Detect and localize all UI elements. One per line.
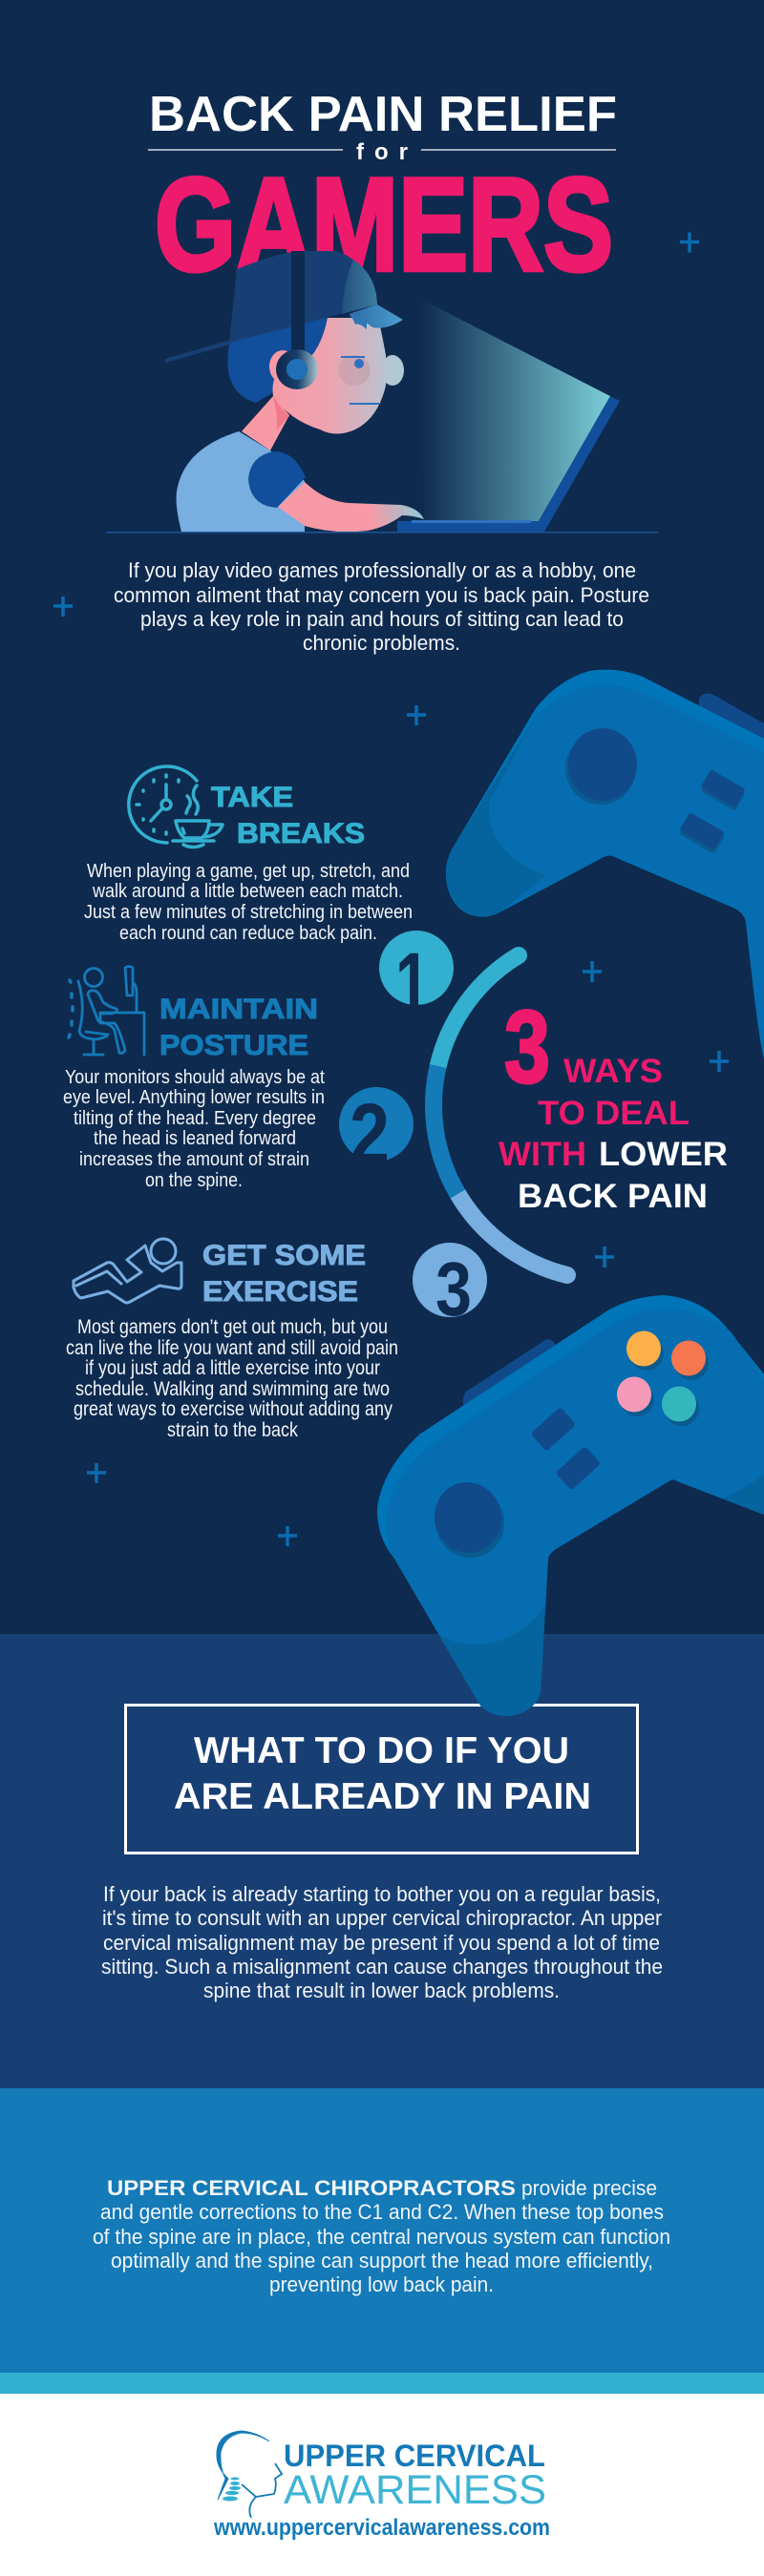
- eye: [354, 359, 364, 368]
- get some exercise section: [66, 1239, 398, 1441]
- cheek: [338, 355, 371, 386]
- decorative plus signs: [53, 233, 729, 1546]
- controller shaded right grip: [723, 1475, 764, 1515]
- eyebrow: [341, 356, 365, 358]
- icon: seated posture: [69, 966, 144, 1055]
- box: what to do heading: [126, 1705, 638, 1853]
- accent strip: [0, 2373, 764, 2394]
- face: [273, 318, 386, 433]
- button: pink: [617, 1376, 651, 1413]
- paragraph: upper cervical chiropractors: of the spine are in place, the central nervous system can function: [93, 2225, 670, 2249]
- paragraph: already in pain: [101, 1882, 663, 2002]
- button: orange: [671, 1340, 706, 1376]
- hat visor: [349, 304, 403, 328]
- intro paragraph: common ailment that may concern you is back pain. Posture: [114, 583, 649, 607]
- paragraph: upper cervical chiropractors: provide precise: [521, 2176, 657, 2200]
- icon: head and spine: [217, 2431, 282, 2518]
- title line: back pain relief: BACK PAIN RELIEF: [149, 87, 617, 142]
- arm: [278, 482, 424, 532]
- heading: get some: GET SOME: [202, 1240, 366, 1271]
- neck: [242, 396, 289, 450]
- joystick shadow: [565, 732, 636, 805]
- paragraph: upper cervical chiropractors: [93, 2176, 670, 2296]
- arc: three-step progress ring: [434, 955, 567, 1275]
- headphone inner: [286, 359, 308, 380]
- action button 2 shadow: [679, 816, 725, 854]
- lower: LOWER: [599, 1136, 728, 1173]
- button: teal: [662, 1386, 696, 1422]
- shirt: [177, 431, 305, 532]
- d-pad button 2: [555, 1446, 601, 1491]
- illustration: gamer at laptop: [106, 251, 658, 533]
- exercise text: great ways to exercise without adding any: [74, 1398, 393, 1420]
- joystick: [427, 1475, 509, 1560]
- paragraph: already in pain: it's time to consult with an upper cervical chiropractor. An upper: [102, 1906, 662, 1930]
- heading: take: TAKE: [211, 782, 293, 813]
- maintain posture section: [63, 966, 325, 1191]
- take breaks section: [84, 766, 413, 944]
- hair: [227, 310, 328, 403]
- heading: 3 ways to deal with lower back pain: [499, 989, 728, 1215]
- controller shaded lobe: [446, 716, 545, 916]
- title word: for: for: [356, 139, 408, 165]
- paragraph: upper cervical chiropractors: UPPER CERVICAL CHIROPRACTORS: [107, 2176, 516, 2200]
- title word: gamers: GAMERS: [155, 151, 613, 299]
- take breaks text: walk around a little between each match.: [92, 881, 403, 902]
- neck shadow: [273, 396, 289, 429]
- joystick: [568, 728, 637, 801]
- exercise text: [66, 1316, 398, 1441]
- panel: chiropractors background: [0, 2088, 764, 2373]
- ear: [269, 350, 296, 383]
- nose: [381, 355, 404, 386]
- headphone band: [291, 251, 305, 350]
- take breaks text: Just a few minutes of stretching in between: [84, 902, 413, 923]
- action button 1: [700, 769, 746, 807]
- intro paragraph: chronic problems.: [303, 631, 460, 655]
- controller: top: [446, 669, 764, 1058]
- hair tuft: [350, 311, 367, 329]
- paragraph: already in pain: If your back is already starting to bother you on a regular basis,: [103, 1882, 661, 1906]
- paragraph: upper cervical chiropractors: optimally and the spine can support the head more efficiently,: [111, 2249, 653, 2272]
- headphone cup: [276, 349, 318, 389]
- hat front panel: [342, 260, 377, 314]
- heading: breaks: BREAKS: [237, 818, 365, 849]
- number badge 3: 3: [435, 1246, 472, 1331]
- title rule left: [148, 149, 343, 151]
- number badge 2: [339, 1087, 414, 1183]
- exercise text: strain to the back: [167, 1419, 298, 1441]
- controller body: [446, 669, 764, 1058]
- number badge 2: 2: [350, 1087, 390, 1183]
- button shadows: [620, 1336, 709, 1426]
- website: www.uppercervicalawareness.com: [213, 2515, 550, 2541]
- paragraph: upper cervical chiropractors: preventing low back pain.: [269, 2272, 494, 2296]
- laptop: [397, 396, 620, 532]
- background: dark navy section: [0, 0, 764, 1634]
- box: what to do heading: ARE ALREADY IN PAIN: [174, 1776, 591, 1817]
- button: yellow: [626, 1330, 661, 1367]
- to deal: TO DEAL: [538, 1095, 690, 1132]
- panel: already in pain background: [0, 1634, 764, 2088]
- hat: [229, 251, 377, 343]
- logo: upper cervical awareness: [213, 2431, 550, 2541]
- box: what to do heading: WHAT TO DO IF YOU: [194, 1730, 569, 1771]
- panel: footer background: [0, 2394, 764, 2576]
- intro paragraph: If you play video games professionally or as a hobby, one: [128, 558, 636, 582]
- big number 3: 3: [504, 989, 550, 1104]
- paragraph: already in pain: sitting. Such a misalignment can cause changes throughout the: [101, 1955, 663, 1979]
- exercise text: Most gamers don’t get out much, but you: [77, 1316, 388, 1338]
- maintain posture text: [63, 1067, 325, 1191]
- with: WITH: [499, 1136, 586, 1173]
- controller body: [377, 1295, 764, 1716]
- take breaks text: each round can reduce back pain.: [119, 923, 377, 944]
- controller shaded grip: [438, 1606, 545, 1716]
- shoulder button: [699, 694, 764, 764]
- back pain: BACK PAIN: [518, 1178, 708, 1215]
- d-pad button 1: [530, 1407, 576, 1452]
- exercise text: schedule. Walking and swimming are two: [75, 1378, 390, 1400]
- maintain posture text: eye level. Anything lower results in: [63, 1087, 325, 1108]
- light cone from screen: [414, 296, 610, 521]
- maintain posture text: on the spine.: [145, 1170, 243, 1191]
- heading: posture: POSTURE: [159, 1030, 308, 1061]
- paragraph: already in pain: spine that result in lower back problems.: [203, 1979, 560, 2002]
- icon: sit-up: [74, 1239, 181, 1303]
- controller: bottom: [377, 1295, 764, 1716]
- heading: maintain: MAINTAIN: [159, 994, 318, 1025]
- action button 2: [679, 812, 725, 850]
- intro paragraph: plays a key role in pain and hours of sitting can lead to: [140, 607, 624, 631]
- maintain posture text: increases the amount of strain: [79, 1149, 309, 1170]
- laptop keys: [412, 520, 531, 523]
- exercise text: if you just add a little exercise into your: [85, 1357, 380, 1379]
- mouth: [350, 403, 379, 405]
- take breaks text: When playing a game, get up, stretch, and: [87, 861, 410, 882]
- hat back strap: [165, 340, 230, 363]
- maintain posture text: the head is leaned forward: [94, 1128, 296, 1149]
- ground line: [106, 532, 658, 533]
- intro paragraph: [114, 558, 649, 655]
- title rule right: [421, 149, 616, 151]
- number badge 1: [379, 931, 454, 1033]
- heading: exercise: EXERCISE: [202, 1276, 358, 1308]
- take breaks text: [84, 861, 413, 944]
- paragraph: already in pain: cervical misalignment may be present if you spend a lot of time: [103, 1931, 660, 1955]
- maintain posture text: tilting of the head. Every degree: [74, 1108, 316, 1129]
- joystick shadow: [428, 1479, 512, 1565]
- title: [148, 87, 617, 299]
- number badge 3: [413, 1243, 487, 1331]
- action button 1 shadow: [700, 773, 746, 811]
- logo line: upper cervical: UPPER CERVICAL: [284, 2439, 545, 2473]
- maintain posture text: Your monitors should always be at: [65, 1067, 325, 1088]
- controller face: [387, 1309, 764, 1716]
- logo line: awareness: AWARENESS: [284, 2467, 546, 2513]
- sleeve: [248, 451, 306, 508]
- shoulder button: [463, 1339, 556, 1422]
- exercise text: can live the life you want and still avoid pain: [66, 1337, 398, 1359]
- icon: clock and coffee: [129, 766, 223, 848]
- controller face: [446, 684, 764, 1058]
- paragraph: upper cervical chiropractors: and gentle corrections to the C1 and C2. When these top bones: [100, 2200, 664, 2224]
- ways: WAYS: [563, 1053, 663, 1090]
- number badge 1: 1: [395, 935, 430, 1033]
